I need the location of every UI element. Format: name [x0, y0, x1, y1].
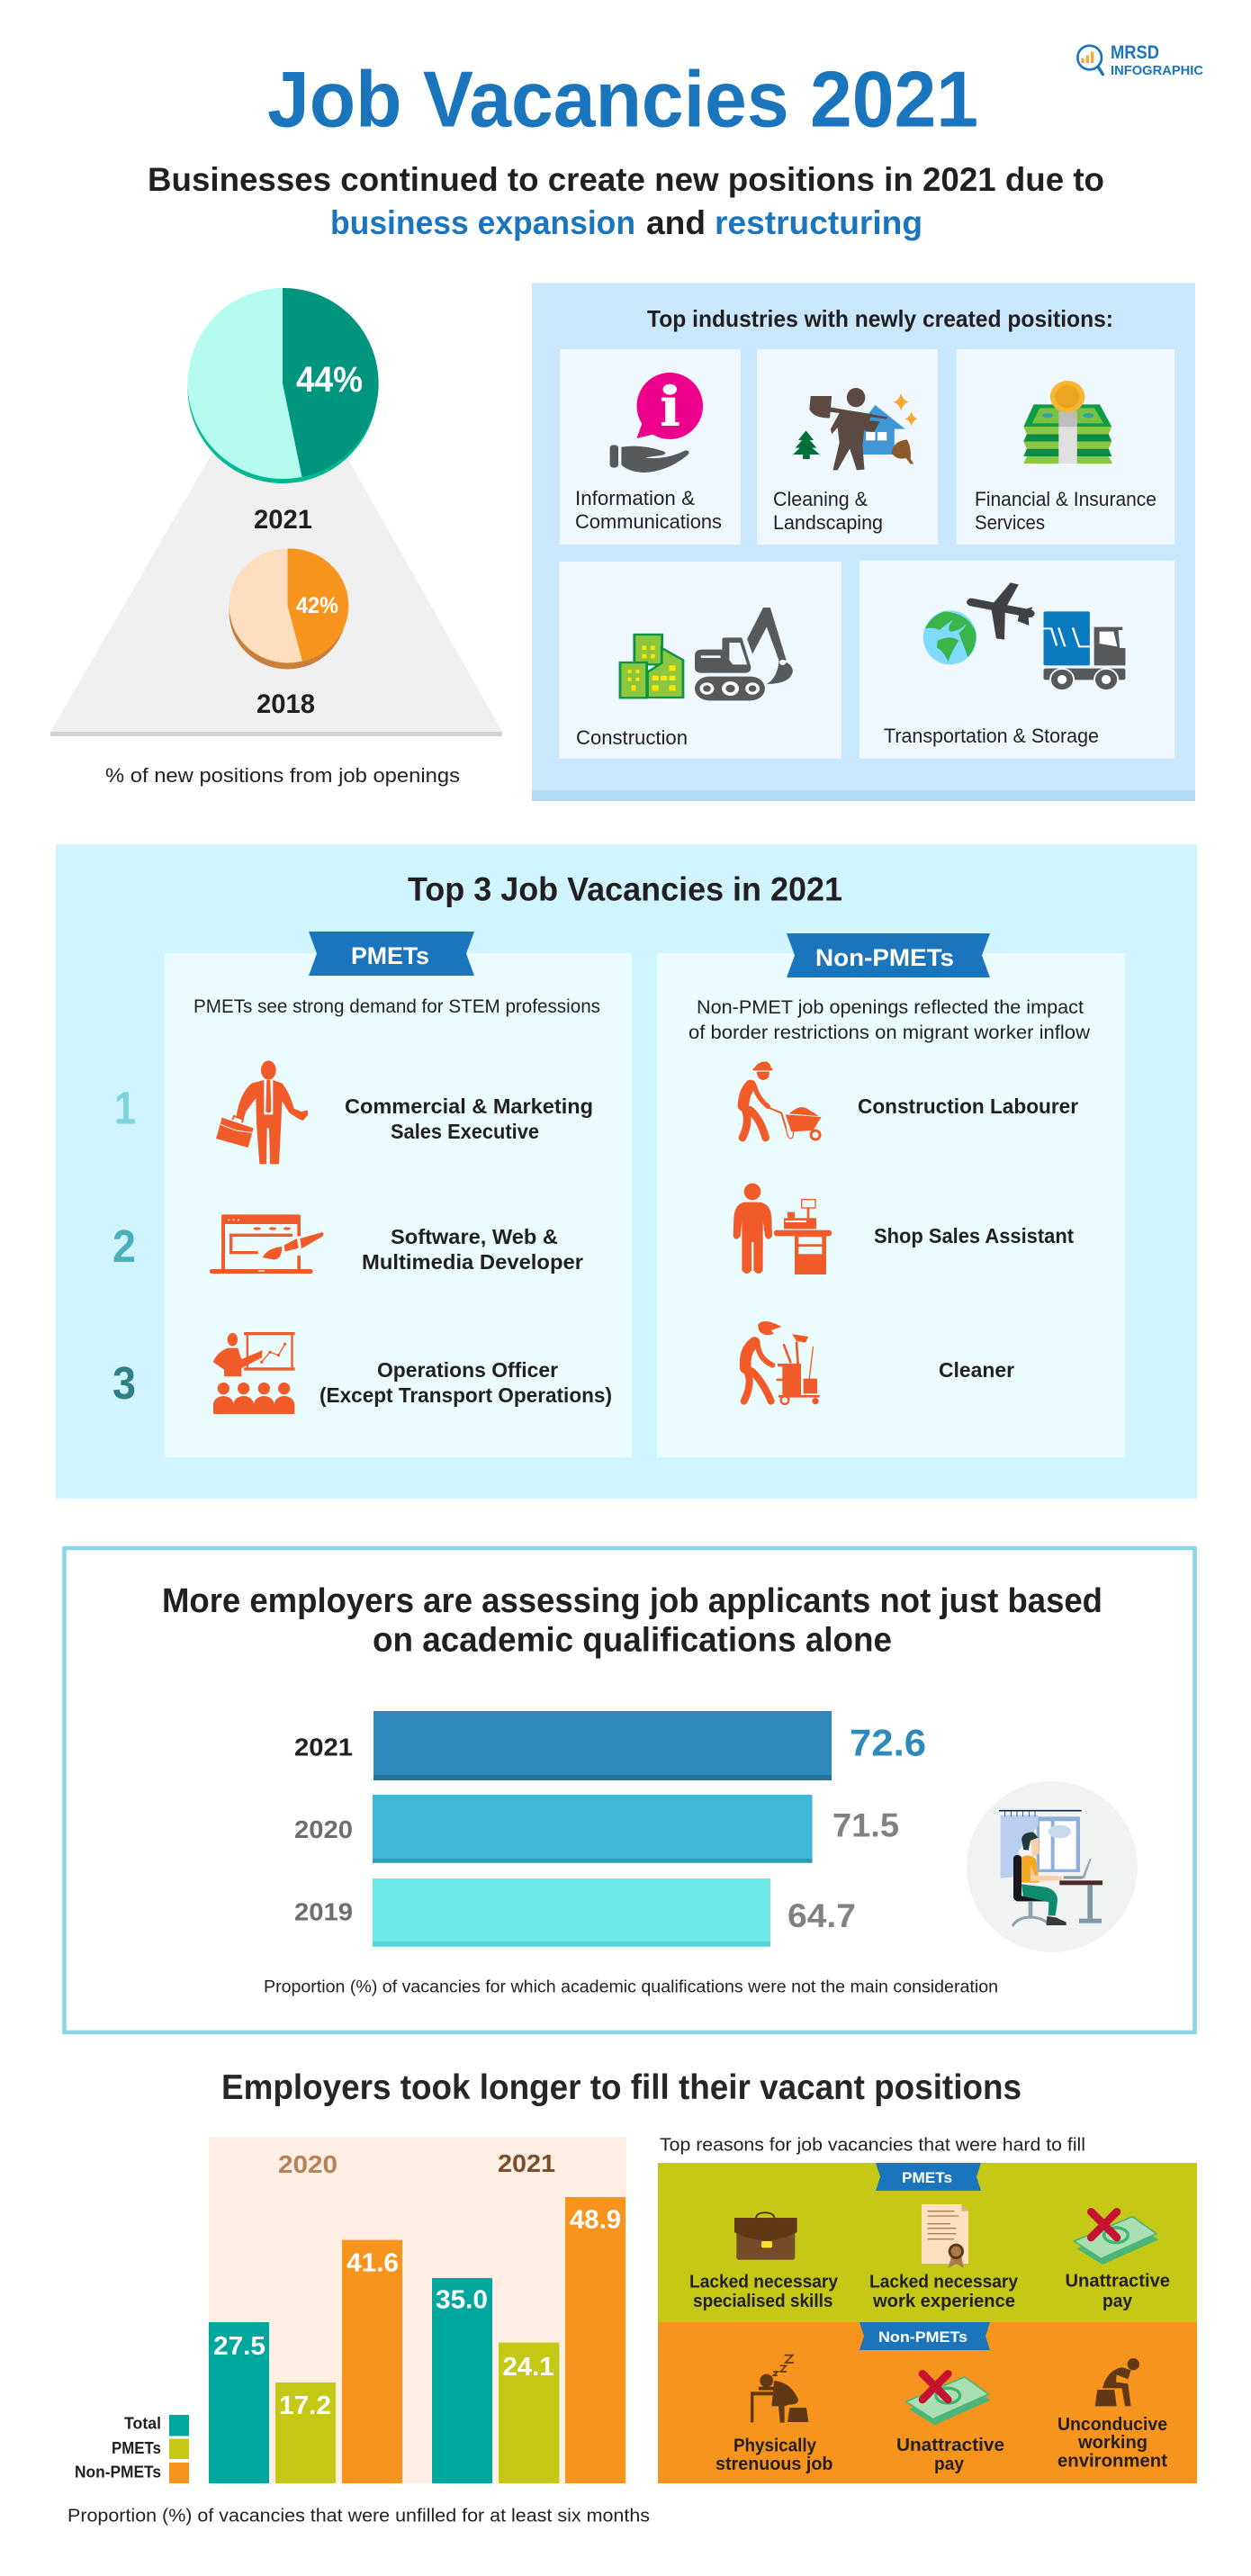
reason: unattractive pay: pay [934, 2454, 965, 2474]
logo: MRSD Infographic [1077, 42, 1203, 78]
tile: information and communications [560, 349, 741, 545]
reason: unattractive pay [1066, 2211, 1170, 2311]
bar: 2019 [294, 1878, 856, 1947]
bars: 2021: 35.0 [436, 2286, 488, 2315]
panel: Non-PMET reasons [658, 2322, 1197, 2483]
heading: Top 3 Job Vacancies in 2021 [408, 871, 842, 907]
job 2: software, web and multimedia developer: Multimedia Developer [362, 1250, 583, 1274]
tile: construction: Construction [576, 726, 688, 749]
icon: presenter and audience [213, 1332, 295, 1414]
job 1: construction labourer [742, 1061, 1078, 1139]
icon: labourer with wheelbarrow [742, 1061, 822, 1139]
bars: 2020: 41.6 [346, 2248, 399, 2277]
icon: cleaner with house [793, 388, 917, 470]
panel: share of new positions pies [50, 288, 502, 787]
ribbon: PMETs: PMETs [902, 2169, 952, 2186]
card: PMETs [165, 932, 632, 1457]
job 1: commercial and marketing sales executive: Sales Executive [391, 1120, 539, 1143]
pyramid backdrop [50, 455, 502, 736]
reason: unconducive working environment: working [1077, 2433, 1148, 2453]
tile: cleaning and landscaping: Landscaping [773, 511, 883, 534]
subtitle: business expansion [330, 204, 635, 241]
bar: 2019: 64.7 [788, 1897, 856, 1934]
job 1: commercial and marketing sales executive: Commercial & Marketing [345, 1094, 593, 1118]
bar chart: vacancies where qualifications were not the main consideration [294, 1711, 926, 1947]
reason: specialised skills: specialised skills [693, 2292, 833, 2311]
description: of border restrictions on migrant worker inflow [688, 1022, 1091, 1043]
bar: 2020 [294, 1795, 899, 1863]
rank number 1: 1 [114, 1082, 136, 1134]
subtitle: and [646, 204, 706, 241]
tile: transportation and storage [860, 561, 1174, 759]
heading: Top industries with newly created positions: [647, 305, 1113, 332]
reason: physically strenuous job: Physically [734, 2436, 817, 2456]
ribbon: Non-PMETs: Non-PMETs [878, 2328, 968, 2346]
reason: unconducive working environment: environment [1058, 2452, 1167, 2472]
panel: top industries [532, 283, 1195, 801]
pie: 2018 42%: 42% [296, 593, 338, 618]
panel: PMET reasons [658, 2163, 1197, 2322]
heading: top reasons: Top reasons for job vacancies that were hard to fill [660, 2135, 1085, 2155]
job 2: shop sales assistant [734, 1184, 1074, 1274]
icon: buildings and excavator [620, 608, 793, 700]
tile: financial and insurance: Financial & Insurance [975, 488, 1156, 510]
reason: work experience [869, 2204, 1019, 2311]
icon: info hand [610, 373, 703, 473]
bar: 2020: 2020 [294, 1815, 353, 1843]
ribbon: Non-PMETs [860, 2322, 990, 2350]
reason: work experience: work experience [872, 2292, 1015, 2311]
subtitle: Businesses continued to create new positions in 2021 due to [148, 161, 1104, 198]
card: Non-PMETs [657, 933, 1125, 1457]
logo: MRSD Infographic: MRSD [1111, 42, 1159, 63]
tile: information and communications: Communications [575, 510, 722, 533]
bars: 2020: 17.2 [279, 2391, 331, 2420]
heading: employers took longer: Employers took longer to fill their vacant positions [221, 2068, 1022, 2107]
bar: 2019: 2019 [294, 1898, 353, 1926]
icon: laptop and paintbrush [210, 1214, 324, 1274]
bar: 2021 [294, 1711, 926, 1780]
bars: 2021 [432, 2197, 626, 2483]
icon: tired worker at desk [751, 2355, 808, 2423]
tile: financial and insurance [957, 349, 1174, 545]
job 1: commercial and marketing sales executive [216, 1060, 593, 1164]
reason: unattractive pay [896, 2373, 1004, 2474]
icon: certificate [922, 2204, 968, 2268]
icon: cleaner with trolley [744, 1321, 820, 1404]
tile: construction [559, 562, 842, 759]
panel: academic qualifications [65, 1548, 1195, 2032]
icon: businessman [216, 1060, 308, 1164]
bars: 2021: 48.9 [570, 2206, 621, 2235]
icon: money stack and coin [1023, 381, 1112, 464]
reason: unattractive pay: Unattractive [1066, 2272, 1170, 2292]
reason: physically strenuous job [716, 2355, 833, 2474]
logo: MRSD Infographic: INFOGRAPHIC [1111, 63, 1203, 78]
icon: briefcase [734, 2212, 797, 2260]
legend: Non-PMETs [75, 2463, 161, 2481]
reason: specialised skills [689, 2212, 839, 2311]
icon: sales assistant at till [734, 1184, 832, 1274]
legend: Total [124, 2415, 161, 2433]
tile: transportation and storage: Transportation & Storage [884, 725, 1099, 747]
job 3: operations officer: Operations Officer [377, 1358, 558, 1382]
bar: 2020: 71.5 [832, 1807, 899, 1844]
label: 2021: 2021 [254, 505, 312, 535]
bars: 2020 [209, 2240, 402, 2483]
reason: unconducive working environment: Unconducive [1058, 2415, 1167, 2435]
icon: crossed-out money [1074, 2211, 1158, 2265]
description: PMETs see strong demand for STEM professions [194, 996, 600, 1017]
rank number 2: 2 [112, 1220, 136, 1272]
heading: on academic qualifications alone [373, 1622, 892, 1660]
icon: distressed person on stool [1095, 2358, 1139, 2406]
description: Non-PMET job openings reflected the impact [697, 997, 1084, 1018]
rank number 3: 3 [112, 1357, 136, 1409]
heading [162, 1582, 1102, 1660]
ribbon: Non-PMETs [787, 933, 990, 977]
bar chart: vacancies unfilled for at least six months [209, 2137, 626, 2483]
description [688, 997, 1091, 1043]
ribbon: PMETs [309, 932, 474, 976]
caption: six months: Proportion (%) of vacancies that were unfilled for at least six months [68, 2506, 650, 2526]
bars: 2021: 24.1 [502, 2353, 554, 2382]
legend [75, 2415, 189, 2483]
subtitle [148, 161, 1104, 241]
job 3: cleaner [744, 1321, 1014, 1404]
tile: information and communications: Information & [575, 487, 695, 509]
tile: cleaning and landscaping: Cleaning & [773, 488, 868, 510]
tile: financial and insurance: Services [975, 511, 1045, 534]
reason: physically strenuous job: strenuous job [716, 2454, 833, 2474]
reason: unattractive pay: Unattractive [896, 2436, 1004, 2455]
bars: 2020: 27.5 [213, 2332, 266, 2361]
icon: globe, plane and truck [923, 582, 1125, 690]
job 3: operations officer: (Except Transport Operations) [320, 1383, 612, 1407]
heading: More employers are assessing job applicants not just based [162, 1582, 1102, 1620]
ribbon: PMETs [876, 2163, 981, 2191]
reason: work experience: Lacked necessary [869, 2273, 1019, 2292]
subtitle: restructuring [715, 204, 922, 241]
tile: cleaning and landscaping [757, 349, 938, 545]
bar: 2021: 72.6 [850, 1722, 926, 1764]
title: Job Vacancies 2021 [267, 54, 978, 144]
pie: 2021 44% [187, 288, 379, 483]
icon: crossed-out money [906, 2373, 991, 2425]
label: 2018: 2018 [256, 689, 315, 719]
year label 2021: 2021 [498, 2149, 555, 2177]
job 3: operations officer [213, 1332, 612, 1414]
job 3: cleaner: Cleaner [939, 1358, 1014, 1382]
ribbon: Non-PMETs: Non-PMETs [815, 944, 954, 971]
year label 2020: 2020 [278, 2150, 338, 2178]
caption: Proportion (%) of vacancies for which academic qualifications were not the main consideration [264, 1978, 998, 1997]
legend: PMETs [112, 2439, 161, 2457]
job 2: software, web and multimedia developer: Software, Web & [391, 1225, 558, 1248]
job 2: software, web and multimedia developer [210, 1214, 583, 1274]
bar: 2021: 2021 [294, 1734, 353, 1761]
reason: unconducive working environment [1058, 2358, 1167, 2472]
reason: specialised skills: Lacked necessary [689, 2273, 839, 2292]
panel: top 3 job vacancies [56, 844, 1197, 1499]
job 1: construction labourer: Construction Labourer [858, 1094, 1078, 1118]
pie: 2018 42% [229, 548, 348, 670]
pie: 2021 44%: 44% [296, 360, 363, 400]
caption: % of new positions from job openings [105, 764, 460, 787]
job 2: shop sales assistant: Shop Sales Assistant [874, 1224, 1074, 1247]
ribbon: PMETs: PMETs [351, 942, 429, 969]
reason: unattractive pay: pay [1102, 2292, 1133, 2311]
icon: person working at desk [967, 1781, 1138, 1952]
